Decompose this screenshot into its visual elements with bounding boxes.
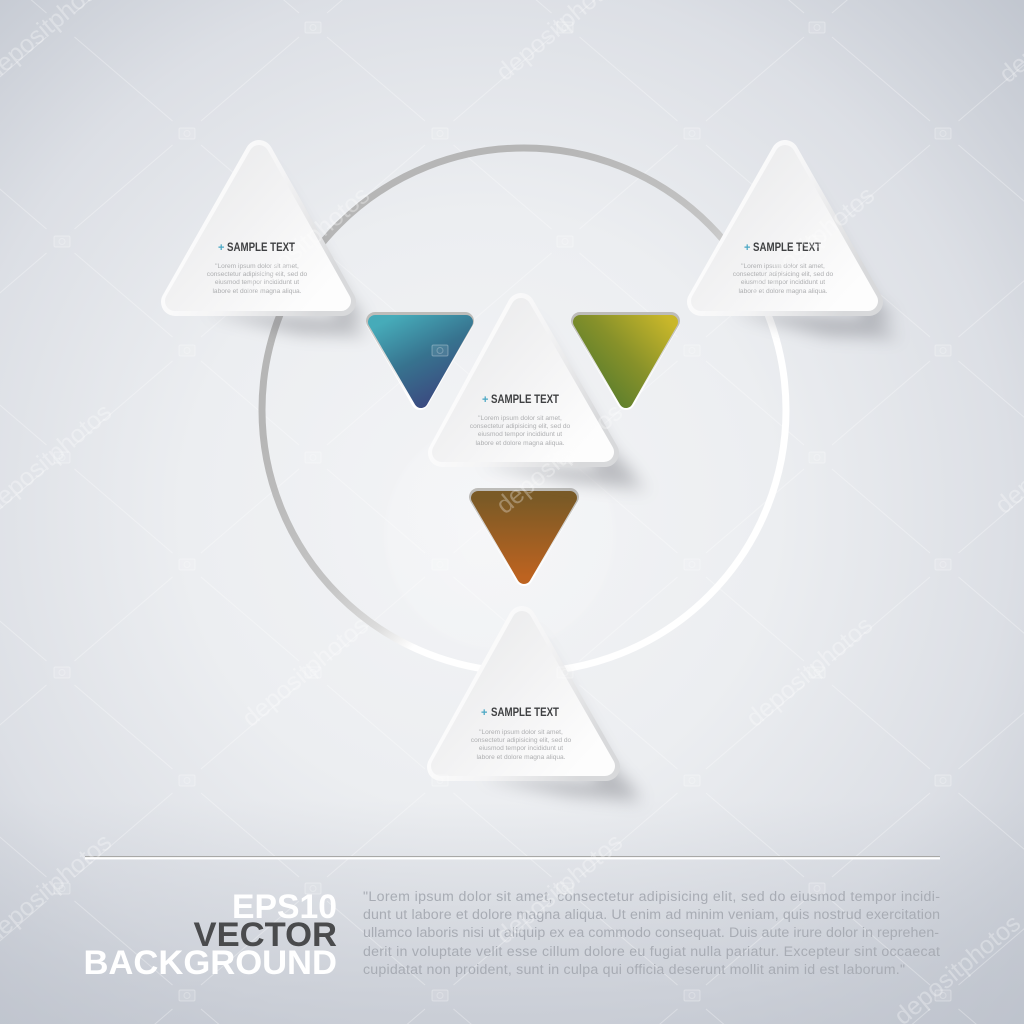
card body text: consectetur adipisicing elit, sed do [733,271,834,278]
card body text: labore et dolore magna aliqua. [476,754,566,761]
card body text: eiusmod tempor incididunt ut [215,279,299,286]
footer heading: EPS10 [232,888,337,926]
footer rule [85,856,940,859]
card shadow [205,160,368,336]
card body text: consectetur adipisicing elit, sed do [470,423,571,430]
watermark text: depositphotos [743,181,880,303]
watermark text: depositphotos [491,828,628,950]
footer heading: BACKGROUND [83,944,337,982]
card body text: labore et dolore magna aliqua. [475,440,565,447]
watermark text: depositphotos [741,611,878,733]
card body text: eiusmod tempor incididunt ut [478,431,562,438]
triangle card: top left: + [218,242,224,254]
triangle card: bottom [441,620,645,802]
watermark text: depositphotos [491,398,628,520]
triangle card: centre: + [482,394,488,406]
footer paragraph: dunt ut labore et dolore magna aliqua. Ut enim ad minim veniam, quis nostrud exercitation [363,907,940,923]
watermark text: depositphotos [238,181,375,303]
card body text: labore et dolore magna aliqua. [212,288,302,295]
triangle card: top left [175,154,368,336]
footer paragraph: cupidatat non proident, sunt in culpa qui officia deserunt mollit anim id est laborum." [363,962,905,978]
card body text: "Lorem ipsum dolor sit amet, [741,263,825,270]
center glow disc [382,417,618,653]
footer paragraph: derit in voluptate velit esse cillum dolore eu fugiat nulla pariatur. Excepteur sint occaecat [363,944,940,960]
card shadow [480,625,645,802]
footer heading [83,888,337,982]
card body text: consectetur adipisicing elit, sed do [207,271,308,278]
card body text: "Lorem ipsum dolor sit amet, [479,729,563,736]
triangle card: centre [442,307,650,490]
card shadow [731,160,900,338]
footer heading: VECTOR [194,916,337,954]
triangle card: bottom: SAMPLE TEXT [491,707,559,719]
footer paragraph [363,889,940,978]
colour triangle: brown [478,497,570,577]
ring [262,148,786,672]
watermark text: depositphotos [237,611,374,733]
card body text: "Lorem ipsum dolor sit amet, [215,263,299,270]
card body text: labore et dolore magna aliqua. [738,288,828,295]
triangle card: top left: SAMPLE TEXT [227,242,295,254]
colour triangle: blue [375,321,466,401]
footer background shading [0,800,1024,1024]
triangle card: top right [701,154,900,338]
footer paragraph: ullamco laboris nisi ut aliquip ex ea commodo consequat. Duis aute irure dolor in reprehen- [363,925,939,941]
card body text: eiusmod tempor incididunt ut [479,745,563,752]
triangle card: top right: SAMPLE TEXT [753,242,821,254]
card body text: eiusmod tempor incididunt ut [741,279,825,286]
card shadow [480,312,650,490]
card body text: "Lorem ipsum dolor sit amet, [478,415,562,422]
triangle card: top right: + [744,242,750,254]
triangle card: bottom: + [481,707,487,719]
triangle card: centre: SAMPLE TEXT [491,394,559,406]
colour triangle: green [580,321,671,401]
footer paragraph: "Lorem ipsum dolor sit amet, consectetur adipisicing elit, sed do eiusmod tempor incidi- [363,889,940,905]
card body text: consectetur adipisicing elit, sed do [471,737,572,744]
